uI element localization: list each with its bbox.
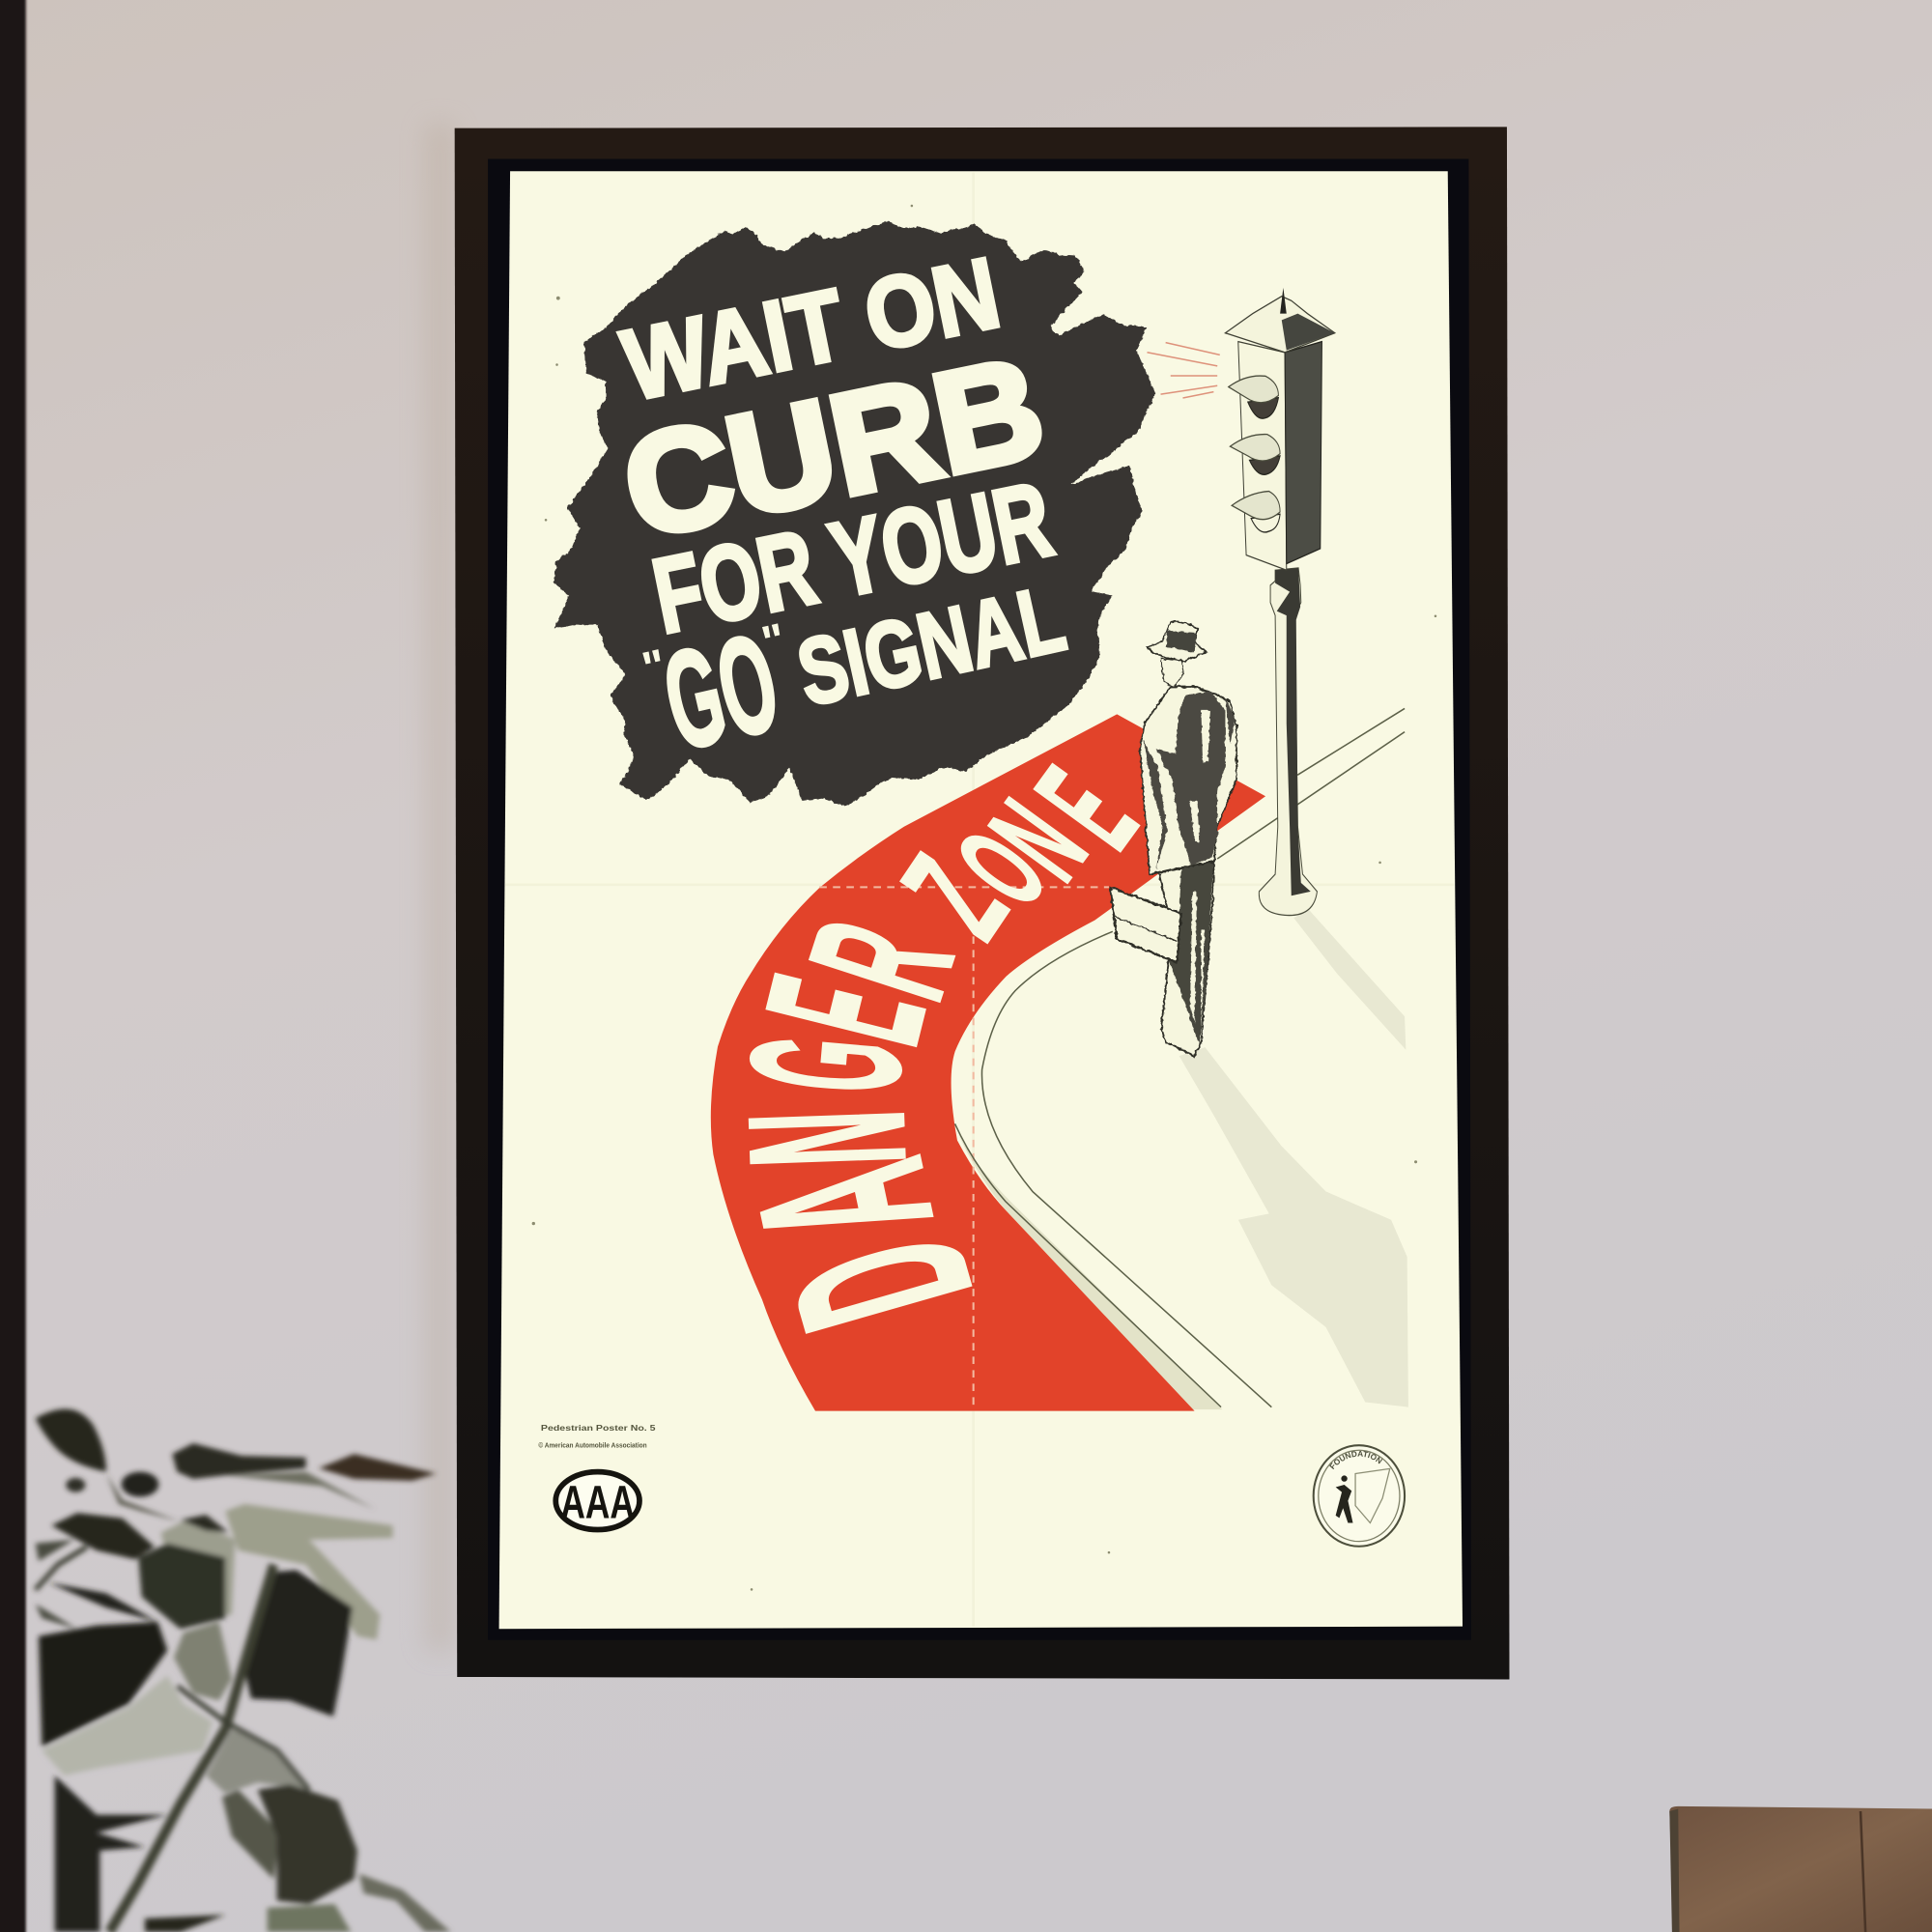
coat highlights bbox=[1190, 710, 1210, 841]
coat shading bbox=[1143, 691, 1235, 870]
letter D: D bbox=[739, 1212, 1022, 1353]
signal lens amber bbox=[1230, 435, 1280, 474]
letter E: E bbox=[721, 958, 972, 1063]
copyright line: © American Automobile Association bbox=[538, 1441, 647, 1450]
paper fold lines bbox=[505, 173, 1454, 1627]
frame inner recess bbox=[488, 159, 1471, 1640]
briefcase bbox=[1110, 888, 1181, 962]
coat and hat bbox=[1140, 621, 1236, 874]
hat bbox=[1147, 621, 1206, 661]
head bbox=[1161, 659, 1183, 687]
closing quote: " bbox=[757, 613, 790, 669]
pole shadow bbox=[1293, 909, 1406, 1050]
ink splash panel bbox=[554, 220, 1155, 807]
red danger zone road bbox=[711, 714, 1265, 1411]
hat band bbox=[1166, 631, 1196, 652]
signal light rays bbox=[1148, 343, 1220, 398]
letter Z: Z bbox=[871, 831, 1038, 964]
letter A: A bbox=[706, 1142, 983, 1264]
headline: curb: CURB bbox=[611, 327, 1056, 569]
wall shadow beside frame bbox=[425, 124, 455, 1651]
fold marks on road bbox=[819, 887, 1109, 1408]
letter G: G bbox=[707, 1029, 947, 1100]
letter N: N bbox=[961, 776, 1115, 904]
opening quote: " bbox=[638, 639, 671, 696]
paper specks bbox=[532, 205, 1436, 1591]
poster series caption: Pedestrian Poster No. 5 bbox=[541, 1423, 656, 1433]
potted plant leaves bbox=[36, 1409, 451, 1932]
man's shadow bbox=[1179, 1047, 1408, 1407]
wooden furniture corner bbox=[1669, 1806, 1932, 1932]
letter E: E bbox=[1005, 741, 1168, 874]
headline: go in quotes: GO bbox=[651, 606, 791, 780]
letter R: R bbox=[768, 899, 994, 1020]
danger zone lettering bbox=[703, 741, 1168, 1353]
signal pole bbox=[1259, 568, 1317, 916]
traffic signal with pole bbox=[1225, 288, 1335, 916]
legs bbox=[1157, 855, 1214, 1056]
headline: wait on: WAIT ON bbox=[614, 236, 1009, 421]
coat bbox=[1140, 687, 1236, 874]
signal lens green bbox=[1232, 492, 1280, 532]
signal cap bbox=[1225, 288, 1335, 353]
headline: signal: SIGNAL bbox=[788, 565, 1073, 725]
letter N: N bbox=[703, 1107, 952, 1171]
AAA logo bbox=[555, 1472, 639, 1530]
curb lines bbox=[955, 708, 1405, 1407]
curb gutter shadow bbox=[955, 1126, 1222, 1409]
letter O: O bbox=[929, 808, 1072, 928]
signal housing right face bbox=[1285, 342, 1321, 564]
foundation seal bbox=[1312, 1444, 1406, 1548]
foundation seal: FOUNDATION bbox=[1329, 1451, 1383, 1470]
dark vertical edge left bbox=[0, 0, 26, 1932]
signal lens red bbox=[1229, 376, 1278, 418]
AAA logo: AAA bbox=[560, 1476, 635, 1528]
picture frame bbox=[455, 127, 1509, 1680]
signal housing left face bbox=[1238, 342, 1287, 570]
headline: for your: FOR YOUR bbox=[644, 461, 1061, 656]
poster paper bbox=[499, 171, 1463, 1629]
pedestrian man bbox=[1110, 621, 1236, 1056]
